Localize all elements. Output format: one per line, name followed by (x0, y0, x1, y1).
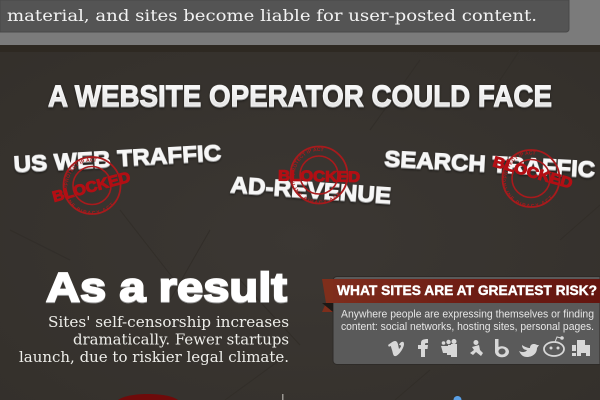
icon: facebook (418, 339, 428, 357)
icon: bebo (495, 339, 509, 357)
icon: vimeo (388, 341, 404, 356)
stamp: blocked: ONLINE PIRACY ACT (292, 181, 339, 203)
ribbon heading: WHAT SITES ARE AT GREATEST RISK? (337, 282, 597, 298)
red circle top (118, 394, 178, 400)
label: search traffic: SEARCH TRAFFIC (384, 146, 596, 182)
stamp: blocked: ONLINE PIRACY ACT (64, 186, 112, 214)
text block: result description (19, 315, 289, 366)
ribbon tail (322, 279, 333, 312)
heading: as a result: As a result (46, 264, 287, 310)
item: search traffic blocked (384, 146, 596, 208)
label: us web traffic: US WEB TRAFFIC (13, 140, 222, 177)
top gray band (0, 0, 600, 45)
icon: reddit (544, 336, 564, 356)
ribbon heading (333, 279, 600, 303)
stamp: blocked: PROTECT IP ACT (64, 158, 97, 186)
panel: greatest risk (322, 276, 600, 364)
text: panel last line: material, and sites become liable for user-posted content. (7, 6, 537, 25)
icon: myspace (441, 339, 457, 357)
stamp: blocked: PROTECT IP ACT (292, 148, 324, 175)
stamp: blocked (51, 156, 132, 215)
stamp: blocked: BLOCKED (278, 168, 360, 186)
item: ad revenue blocked (230, 146, 392, 208)
icons: social networks (388, 336, 590, 357)
text block: result description: Sites' self-censorship increases (48, 315, 289, 331)
blue dot (454, 396, 462, 400)
text block: result description: dramatically. Fewer startups (73, 332, 289, 348)
panel description (341, 308, 594, 333)
label: ad-revenue: AD-REVENUE (230, 172, 392, 208)
icon: aim (470, 340, 483, 356)
panel: top text panel (0, 0, 569, 32)
icon: twitter (519, 344, 539, 357)
vertical line (282, 394, 284, 400)
icon: digg (572, 340, 590, 356)
text block: result description: launch, due to riskier legal climate. (19, 350, 289, 366)
heading: A WEBSITE OPERATOR COULD FACE (48, 80, 552, 113)
stamp: blocked: BLOCKED (51, 169, 132, 206)
stamp: blocked (491, 149, 575, 208)
item: us web traffic blocked (13, 140, 222, 215)
stamp: blocked: PROTECT IP ACT (504, 151, 536, 178)
stamp: blocked: BLOCKED (491, 154, 575, 192)
stamp: blocked (278, 146, 360, 204)
stamp: blocked: ONLINE PIRACY ACT (503, 178, 551, 206)
